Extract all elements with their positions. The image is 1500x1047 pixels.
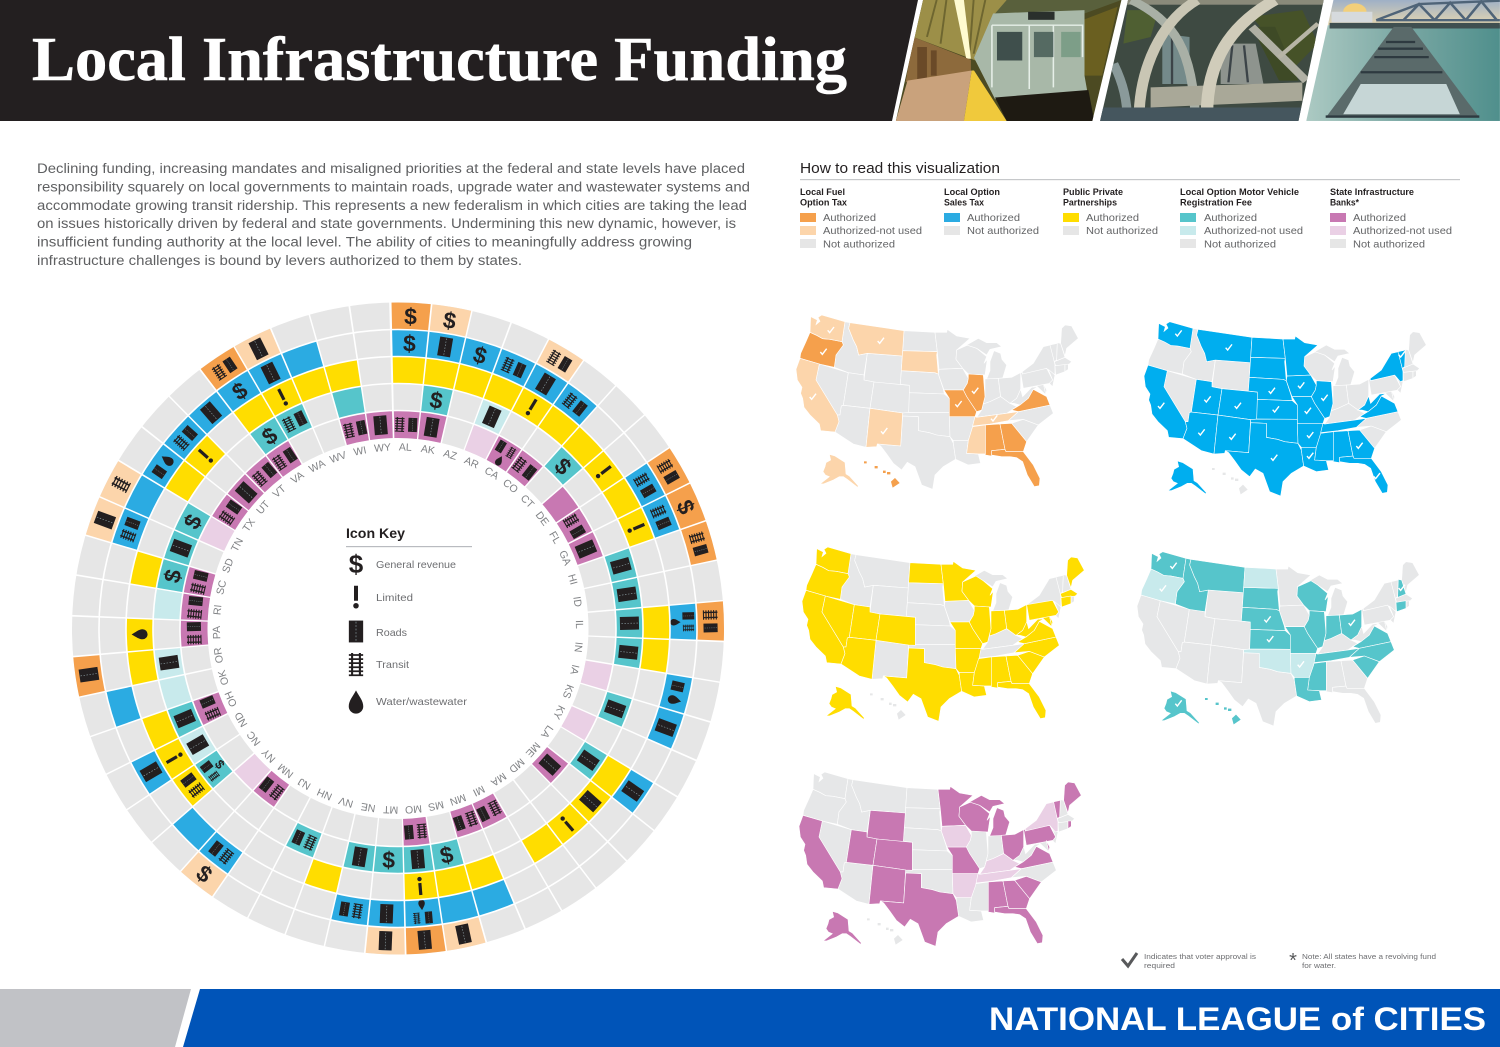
state abbreviation labels: NM bbox=[276, 761, 296, 780]
legend column: local option motor vehicle registration fee: Local Option Motor Vehicle bbox=[1180, 187, 1299, 197]
state abbreviation labels: LA bbox=[538, 723, 555, 740]
photo: highway interchange bbox=[1100, 0, 1333, 121]
legend: how to read this visualization bbox=[800, 161, 1460, 250]
intro text block: insufficient funding authority at the local level. The ability of cities to meaningfully address growing bbox=[37, 234, 692, 250]
note: revolving fund for water: Note: All states have a revolving fund bbox=[1302, 952, 1436, 961]
map: local fuel option tax bbox=[796, 315, 1078, 489]
legend column: local fuel option tax: Option Tax bbox=[800, 198, 847, 208]
icon key heading: Icon Key bbox=[346, 525, 405, 541]
key item: general revenue bbox=[349, 549, 456, 579]
legend column: public private partnerships: Public Private bbox=[1063, 187, 1123, 197]
legend column: public private partnerships: Partnerships bbox=[1063, 198, 1117, 208]
header bar with title bbox=[0, 0, 918, 121]
legend column: local fuel option tax: Authorized-not used bbox=[823, 225, 922, 237]
ring: local option motor vehicle registration fee: $ bbox=[257, 421, 282, 450]
ring: local option motor vehicle registration fee: $ bbox=[178, 510, 207, 533]
key item: transit: Transit bbox=[376, 659, 409, 671]
state abbreviation labels: TN bbox=[229, 536, 246, 554]
key item: limited: Limited bbox=[376, 592, 413, 604]
icon key bbox=[346, 525, 472, 714]
state abbreviation labels: PA bbox=[211, 626, 223, 639]
state abbreviation labels: IN bbox=[572, 641, 585, 653]
state abbreviation labels: WY bbox=[374, 441, 391, 455]
ring: local option motor vehicle registration fee: $ bbox=[158, 567, 187, 585]
footer organization name: NATIONAL LEAGUE of CITIES bbox=[989, 1001, 1486, 1037]
state abbreviation labels: FL bbox=[546, 529, 563, 546]
legend column: public private partnerships bbox=[1063, 187, 1158, 237]
state abbreviation labels: MD bbox=[506, 755, 527, 775]
ring: local fuel option tax: $ bbox=[191, 860, 218, 888]
state abbreviation labels: CO bbox=[500, 477, 520, 496]
intro text block: on issues historically driven by federal and state governments. Undermining this new dynamic, however, is bbox=[37, 216, 736, 231]
ring: local option motor vehicle registration fee bbox=[153, 384, 643, 874]
note: revolving fund for water: for water. bbox=[1302, 961, 1336, 970]
state abbreviation labels: SC bbox=[214, 579, 229, 596]
state abbreviation labels: SD bbox=[220, 556, 237, 575]
state abbreviation labels: AR bbox=[462, 455, 481, 472]
note: voter approval checkmark: Indicates that voter approval is bbox=[1144, 952, 1256, 961]
state abbreviation labels: HI bbox=[565, 573, 579, 586]
legend column: local fuel option tax: Local Fuel bbox=[800, 187, 845, 197]
intro text block bbox=[37, 161, 750, 268]
legend column: local option sales tax: Local Option bbox=[944, 187, 1000, 197]
state abbreviation labels: CT bbox=[518, 492, 537, 511]
state abbreviation labels: WA bbox=[307, 457, 327, 476]
ring: local option motor vehicle registration fee: $ bbox=[549, 453, 577, 480]
state abbreviation labels: IL bbox=[573, 620, 585, 629]
state abbreviation labels: MI bbox=[471, 783, 487, 798]
ring: local fuel option tax: $ bbox=[441, 306, 458, 334]
legend column: local option motor vehicle registration fee: Authorized bbox=[1204, 212, 1257, 224]
map: state infrastructure banks bbox=[799, 772, 1081, 946]
state abbreviation labels: NY bbox=[260, 746, 278, 765]
state abbreviation labels: VT bbox=[270, 482, 289, 501]
note: voter approval checkmark bbox=[1122, 952, 1256, 970]
radial chart: state funding wheel bbox=[73, 302, 724, 955]
photo: subway train bbox=[890, 0, 1123, 121]
state abbreviation labels: MS bbox=[427, 798, 445, 813]
key item: water/wastewater bbox=[349, 690, 468, 714]
intro text block: infrastructure challenges is bound by levers authorized to them by states. bbox=[37, 253, 522, 268]
ring: local fuel option tax bbox=[73, 302, 724, 955]
note: voter approval checkmark: required bbox=[1144, 961, 1175, 970]
key item: water/wastewater: Water/wastewater bbox=[376, 696, 468, 708]
legend column: local option motor vehicle registration fee: Registration Fee bbox=[1180, 198, 1252, 208]
legend column: state infrastructure banks bbox=[1330, 187, 1452, 250]
ring: local option sales tax: $ bbox=[403, 330, 417, 356]
ring: public private partnerships bbox=[126, 356, 670, 901]
map: local option motor vehicle registration fee bbox=[1137, 552, 1419, 726]
state abbreviation labels: AZ bbox=[442, 447, 459, 463]
state abbreviation labels: GA bbox=[556, 549, 573, 567]
state abbreviation labels: OH bbox=[223, 689, 240, 709]
legend heading: How to read this visualization bbox=[800, 161, 1000, 177]
state abbreviation labels: WI bbox=[353, 444, 368, 459]
state abbreviation labels: NC bbox=[244, 728, 263, 748]
key item: general revenue: $ bbox=[349, 549, 364, 579]
note: revolving fund for water bbox=[1289, 950, 1436, 972]
legend column: local option motor vehicle registration fee: Authorized-not used bbox=[1204, 225, 1303, 237]
ring: local option sales tax: $ bbox=[470, 341, 490, 369]
key item: roads bbox=[349, 621, 407, 642]
state abbreviation labels: MA bbox=[489, 770, 508, 788]
state abbreviation labels: ID bbox=[570, 596, 584, 608]
legend column: local fuel option tax: Not authorized bbox=[823, 238, 895, 250]
note: revolving fund for water: * bbox=[1289, 950, 1297, 972]
state abbreviation labels: MN bbox=[448, 791, 468, 808]
legend column: local option sales tax: Authorized bbox=[967, 212, 1020, 224]
state abbreviation labels: RI bbox=[211, 604, 224, 616]
state abbreviation labels: KY bbox=[550, 703, 567, 721]
legend column: local option motor vehicle registration fee bbox=[1180, 187, 1303, 250]
intro text block: Declining funding, increasing mandates and misaligned priorities at the federal and state levels have placed bbox=[37, 161, 745, 176]
photo: water treatment bbox=[1302, 0, 1500, 121]
intro text block: responsibility squarely on local governments to maintain roads, upgrade water and wastewater systems and bbox=[37, 180, 750, 194]
legend column: state infrastructure banks: Banks* bbox=[1330, 198, 1359, 208]
state abbreviation labels: AK bbox=[420, 443, 436, 457]
map: local option sales tax bbox=[1144, 322, 1426, 496]
state abbreviation labels: UT bbox=[254, 498, 273, 517]
state abbreviation labels: OR bbox=[212, 646, 226, 664]
state abbreviation labels bbox=[211, 441, 585, 816]
state abbreviation labels: KS bbox=[560, 683, 576, 700]
key item: transit bbox=[349, 653, 409, 676]
intro text block: accommodate growing transit ridership. This represents a new federalism in which cities are taking the lead bbox=[37, 198, 747, 213]
state abbreviation labels: ND bbox=[232, 709, 250, 729]
ring: local option motor vehicle registration fee: $ bbox=[382, 847, 396, 873]
ring: local option motor vehicle registration fee: $ bbox=[212, 757, 228, 772]
header photos: transit, highway, water bbox=[890, 0, 1500, 121]
ring: state infrastructure banks bbox=[180, 410, 613, 847]
state abbreviation labels: OK bbox=[216, 669, 232, 686]
state abbreviation labels: VA bbox=[289, 469, 306, 487]
ring: local fuel option tax: $ bbox=[671, 496, 700, 518]
state abbreviation labels: WV bbox=[328, 449, 348, 466]
legend column: local option sales tax: Sales Tax bbox=[944, 198, 984, 208]
legend column: local fuel option tax: Authorized bbox=[823, 212, 876, 224]
legend column: local option motor vehicle registration fee: Not authorized bbox=[1204, 238, 1276, 250]
key item: general revenue: General revenue bbox=[376, 559, 456, 571]
ring: local fuel option tax: $ bbox=[404, 303, 418, 330]
legend column: public private partnerships: Not authorized bbox=[1086, 225, 1158, 237]
legend column: local fuel option tax bbox=[800, 187, 922, 250]
legend column: state infrastructure banks: State Infrastructure bbox=[1330, 187, 1414, 197]
state abbreviation labels: AL bbox=[399, 441, 412, 454]
state abbreviation labels: NH bbox=[315, 785, 334, 803]
state abbreviation labels: IA bbox=[567, 663, 581, 676]
map: public private partnerships bbox=[802, 547, 1084, 721]
ring: local option sales tax bbox=[105, 329, 697, 928]
footer bar bbox=[0, 989, 1500, 1047]
legend column: state infrastructure banks: Authorized bbox=[1353, 212, 1406, 224]
legend column: state infrastructure banks: Authorized-not used bbox=[1353, 225, 1452, 237]
ring: local option motor vehicle registration fee: $ bbox=[428, 386, 445, 414]
key item: limited bbox=[353, 586, 413, 608]
legend column: state infrastructure banks: Not authorized bbox=[1353, 238, 1425, 250]
state abbreviation labels: NE bbox=[360, 800, 376, 814]
legend column: local option sales tax bbox=[944, 187, 1039, 237]
state abbreviation labels: NJ bbox=[296, 775, 313, 792]
state abbreviation labels: MT bbox=[382, 803, 399, 816]
state abbreviation labels: CA bbox=[482, 465, 501, 482]
state abbreviation labels: TX bbox=[240, 517, 258, 534]
ring: local option sales tax: $ bbox=[227, 376, 252, 405]
title: Local Infrastructure Funding bbox=[32, 26, 847, 94]
legend column: local option sales tax: Not authorized bbox=[967, 225, 1039, 237]
key item: roads: Roads bbox=[376, 627, 407, 639]
state abbreviation labels: ME bbox=[523, 740, 542, 759]
ring: local option motor vehicle registration fee: $ bbox=[438, 841, 456, 869]
legend column: public private partnerships: Authorized bbox=[1086, 212, 1139, 224]
state abbreviation labels: NV bbox=[337, 794, 355, 810]
state abbreviation labels: DE bbox=[533, 509, 551, 528]
state abbreviation labels: MO bbox=[405, 802, 422, 816]
